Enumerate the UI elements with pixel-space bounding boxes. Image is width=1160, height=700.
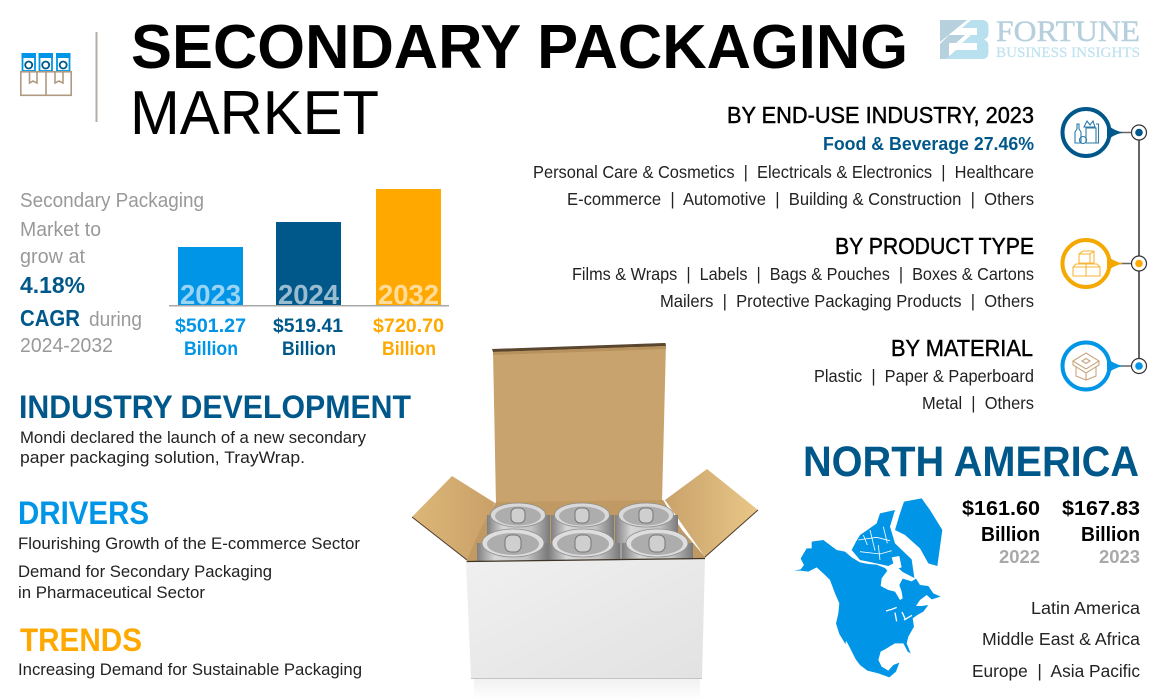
panel: by end-use industry: Personal Care & Cosmetics | Electricals & Electronics | Healthcare (533, 162, 1034, 182)
panel: by end-use industry: BY END-USE INDUSTRY, 2023 (727, 102, 1034, 128)
bar 2023: Billion (184, 339, 238, 360)
title: MARKET (130, 79, 379, 148)
CAGR text block: Market to (20, 219, 101, 241)
logo: Fortune Business Insights: FORTUNE (996, 15, 1140, 48)
bar 2024 (273, 222, 343, 360)
bar 2024: $519.41 (273, 316, 343, 337)
CAGR text block: 4.18% (20, 272, 85, 298)
illustration: open box with six cans (412, 343, 758, 700)
title: SECONDARY PACKAGING (131, 13, 908, 82)
CAGR text block: during (89, 309, 142, 331)
icon: material marker (1062, 342, 1146, 390)
bar 2032 (373, 189, 444, 360)
header divider (96, 32, 98, 122)
icon: product type marker (1062, 240, 1146, 287)
CAGR text block: Secondary Packaging (20, 190, 204, 212)
other regions: Latin America (1031, 598, 1140, 618)
panel: drivers: in Pharmaceutical Sector (18, 583, 205, 602)
panel: by end-use industry: E-commerce | Automotive | Building & Construction | Others (567, 189, 1034, 209)
stat 2023: 2023 (1099, 547, 1140, 567)
panel: industry development: paper packaging solution, TrayWrap. (20, 448, 305, 467)
CAGR text block: CAGR (20, 305, 80, 331)
stat 2023: Billion (1081, 524, 1140, 546)
panel: trends (18, 622, 362, 679)
panel: trends: Increasing Demand for Sustainable Packaging (18, 660, 362, 679)
stat 2023 (1062, 498, 1140, 567)
panel: drivers: Flourishing Growth of the E-commerce Sector (18, 534, 360, 553)
other regions (972, 598, 1140, 681)
bar 2032: $720.70 (373, 316, 444, 337)
CAGR text block: 2024-2032 (20, 335, 113, 357)
panel: trends: TRENDS (20, 622, 142, 658)
map water detail (892, 556, 902, 569)
bar 2024: Billion (282, 339, 336, 360)
panel: by material (814, 335, 1034, 413)
icon: end-use marker (1062, 109, 1146, 156)
panel: by product type: Films & Wraps | Labels | Bags & Pouches | Boxes & Cartons (572, 264, 1034, 284)
panel: drivers: Demand for Secondary Packaging (18, 562, 272, 581)
bar 2023: $501.27 (175, 316, 246, 337)
stat 2022: $161.60 (962, 498, 1040, 520)
stat 2022: Billion (981, 524, 1040, 546)
bar 2032: Billion (382, 339, 436, 360)
panel: north america: NORTH AMERICA (803, 438, 1139, 486)
panel: by product type (572, 233, 1034, 311)
stat 2022 (962, 498, 1040, 567)
panel: drivers: DRIVERS (18, 495, 149, 531)
bar 2032: 2032 (378, 279, 439, 310)
icon: secondary packaging boxes with cans (21, 53, 71, 95)
logo: Fortune Business Insights: BUSINESS INSIGHTS (996, 45, 1140, 61)
timeline connector (1120, 132, 1140, 366)
panel: by end-use industry: Food & Beverage 27.46% (823, 134, 1034, 154)
stat 2023: $167.83 (1062, 498, 1140, 520)
other regions: Middle East & Africa (982, 629, 1140, 649)
CAGR text block (20, 190, 204, 357)
map: North America (794, 498, 942, 677)
logo: Fortune Business Insights (940, 15, 1140, 61)
panel: by material: Metal | Others (922, 393, 1034, 413)
stat 2022: 2022 (999, 547, 1040, 567)
CAGR text block: grow at (20, 246, 85, 268)
bar 2023 (175, 247, 246, 360)
other regions: Europe | Asia Pacific (972, 661, 1140, 681)
bar chart: market size (169, 189, 449, 360)
panel: by product type: Mailers | Protective Packaging Products | Others (660, 291, 1034, 311)
panel: by product type: BY PRODUCT TYPE (835, 233, 1034, 259)
cans (477, 503, 693, 561)
title (130, 13, 908, 148)
panel: drivers (18, 495, 360, 602)
panel: industry development: INDUSTRY DEVELOPMENT (19, 389, 411, 425)
panel: by end-use industry (533, 102, 1034, 209)
panel: industry development: Mondi declared the launch of a new secondary (20, 428, 366, 447)
bar 2024: 2024 (278, 279, 339, 310)
panel: north america (794, 438, 1140, 681)
panel: by material: Plastic | Paper & Paperboard (814, 366, 1034, 386)
panel: by material: BY MATERIAL (891, 335, 1033, 361)
panel: industry development (19, 389, 411, 467)
bar 2023: 2023 (180, 279, 241, 310)
